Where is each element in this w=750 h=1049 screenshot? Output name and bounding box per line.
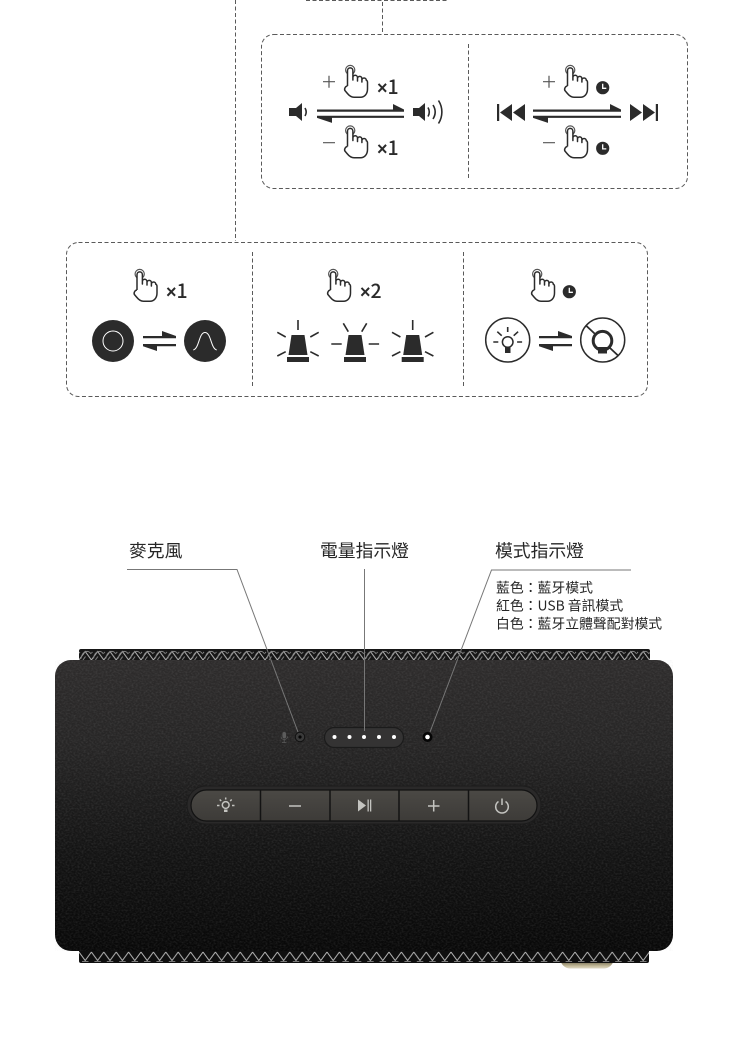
icon: plus: [428, 800, 440, 812]
label: mode indicator: 模式指示燈: [495, 537, 584, 563]
label: mode indicator: [430, 537, 662, 732]
panel: power, alert and light modes: [66, 242, 648, 396]
icon: minus: [289, 805, 301, 807]
battery indicator: [324, 728, 404, 748]
volume control: ×1: [377, 71, 399, 100]
icon: power: [496, 798, 508, 813]
label: microphone: [127, 537, 298, 732]
mode colour legend: [496, 577, 662, 633]
track skip control: [497, 65, 658, 158]
mode indicator: [422, 732, 432, 742]
double press: alert beacons: ×2: [360, 275, 382, 304]
bottom stitched fabric strip: [79, 949, 649, 963]
volume control: [289, 65, 442, 161]
top stitched fabric strip: [79, 649, 650, 663]
label: battery indicator: 電量指示燈: [320, 537, 409, 563]
mode colour legend: 白色：藍牙立體聲配對模式: [496, 613, 662, 633]
icon: light: [217, 798, 234, 812]
microphone: [281, 732, 305, 742]
leather body: [55, 660, 673, 951]
speaker feet: [560, 960, 614, 968]
icon: play pause: [358, 800, 371, 812]
single press: mode switch: ×1: [166, 275, 188, 304]
button bar: [187, 786, 541, 824]
label: microphone: 麥克風: [129, 537, 183, 563]
double press: alert beacons: [277, 269, 433, 362]
connector: dashed bracket to volume panel: [306, 0, 447, 32]
mode colour legend: 紅色：USB 音訊模式: [496, 595, 623, 615]
panel: volume and track control: [262, 34, 688, 188]
speaker top view: [55, 649, 673, 968]
single press: mode switch: [92, 269, 226, 362]
mode colour legend: 藍色：藍牙模式: [496, 577, 593, 597]
connector: dashed line to lower panel: [234, 0, 236, 241]
long press: light on and off: [486, 269, 625, 362]
volume control: ×1: [377, 132, 399, 161]
